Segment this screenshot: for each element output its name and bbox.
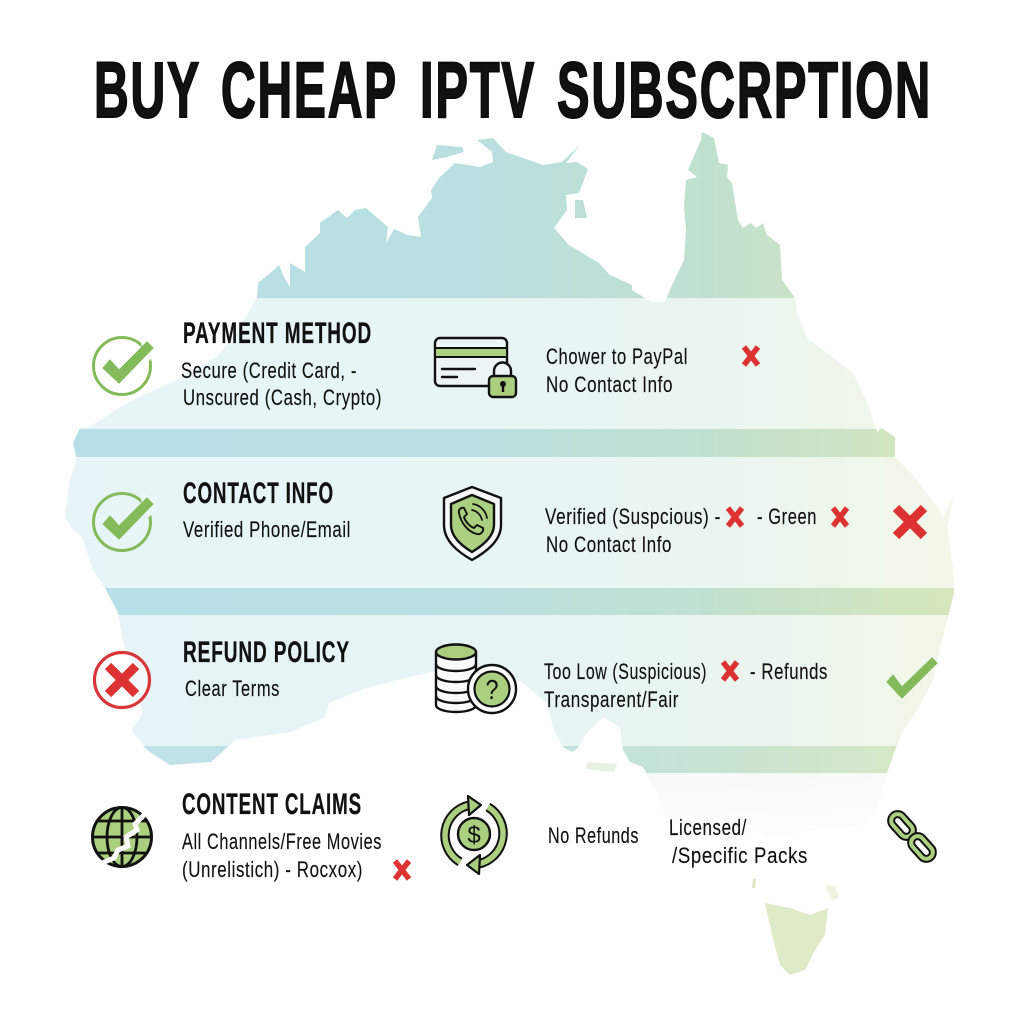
icon: money cycle arrows: $ bbox=[467, 822, 481, 849]
icon: large red x bbox=[896, 508, 924, 536]
text: contact warning: Verified (Suspcious) - bbox=[545, 504, 721, 529]
panel: refund policy row bbox=[94, 636, 937, 713]
title: CHEAP bbox=[221, 45, 398, 134]
icon: red x bbox=[728, 508, 742, 526]
text: payment warning bbox=[546, 344, 688, 397]
icon: coin stack with question mark bbox=[436, 644, 516, 713]
icon: green check bbox=[887, 658, 937, 698]
text: no refunds: No Refunds bbox=[548, 823, 639, 848]
icon: money cycle arrows bbox=[445, 796, 503, 874]
text: content claims details: (Unrelistich) - Rocxox) bbox=[182, 857, 363, 882]
text: licensed specific packs: /Specific Packs bbox=[672, 843, 808, 868]
text: content claims details bbox=[182, 829, 382, 882]
text: contact info details: Verified Phone/Email bbox=[183, 517, 351, 542]
text: refund policy details: Clear Terms bbox=[185, 676, 280, 701]
text: payment method details bbox=[181, 358, 382, 410]
map: Flinders Island bbox=[825, 885, 839, 900]
text: refund warning: - Refunds bbox=[750, 659, 828, 684]
panel: payment method row bbox=[94, 317, 758, 410]
icon: red x bbox=[723, 662, 737, 680]
title: BUY bbox=[94, 45, 201, 134]
icon: green check in circle bbox=[94, 490, 160, 550]
heading: refund policy: REFUND POLICY bbox=[183, 636, 350, 669]
map: Tasmania bbox=[765, 903, 828, 975]
map: King Island bbox=[752, 879, 756, 888]
text: payment warning: Chower to PayPal bbox=[546, 344, 688, 369]
icon: red x bbox=[395, 861, 409, 879]
icon: chain link bbox=[888, 811, 936, 862]
text: licensed specific packs bbox=[669, 815, 808, 868]
title bbox=[94, 45, 932, 134]
icon: shield with phone bbox=[444, 487, 501, 560]
text: refund warning: Too Low (Suspicious) bbox=[544, 659, 707, 684]
icon: coin stack with question mark: ? bbox=[486, 674, 498, 705]
map: Eyre peninsula fragment bbox=[586, 762, 617, 772]
text: content claims details: All Channels/Free Movies bbox=[182, 829, 382, 854]
text: refund warning: Transparent/Fair bbox=[544, 687, 679, 712]
heading: payment method: PAYMENT METHOD bbox=[183, 317, 372, 350]
map of Australia with banded rows bbox=[65, 132, 954, 975]
heading: contact info: CONTACT INFO bbox=[183, 477, 334, 510]
icon: green check in circle bbox=[94, 334, 160, 394]
text: contact warning: No Contact Info bbox=[546, 532, 672, 557]
text: contact warning: - Green bbox=[757, 504, 817, 529]
icon: red x bbox=[744, 347, 758, 365]
text: licensed specific packs: Licensed/ bbox=[669, 815, 747, 840]
text: payment method details: Unscured (Cash, Crypto) bbox=[183, 385, 382, 410]
title: IPTV bbox=[420, 45, 536, 134]
heading: content claims: CONTENT CLAIMS bbox=[182, 788, 362, 821]
text: contact warning bbox=[545, 504, 817, 557]
panel: contact info row bbox=[94, 477, 924, 560]
text: refund warning bbox=[544, 659, 828, 712]
text: payment warning: No Contact Info bbox=[546, 372, 673, 397]
icon: red x in circle bbox=[94, 652, 150, 708]
text: payment method details: Secure (Credit Card, - bbox=[181, 358, 357, 383]
icon: red x bbox=[833, 508, 847, 526]
icon: cracked globe bbox=[92, 808, 152, 866]
icon: credit card with padlock bbox=[435, 338, 516, 397]
panel: content claims row bbox=[92, 788, 936, 882]
